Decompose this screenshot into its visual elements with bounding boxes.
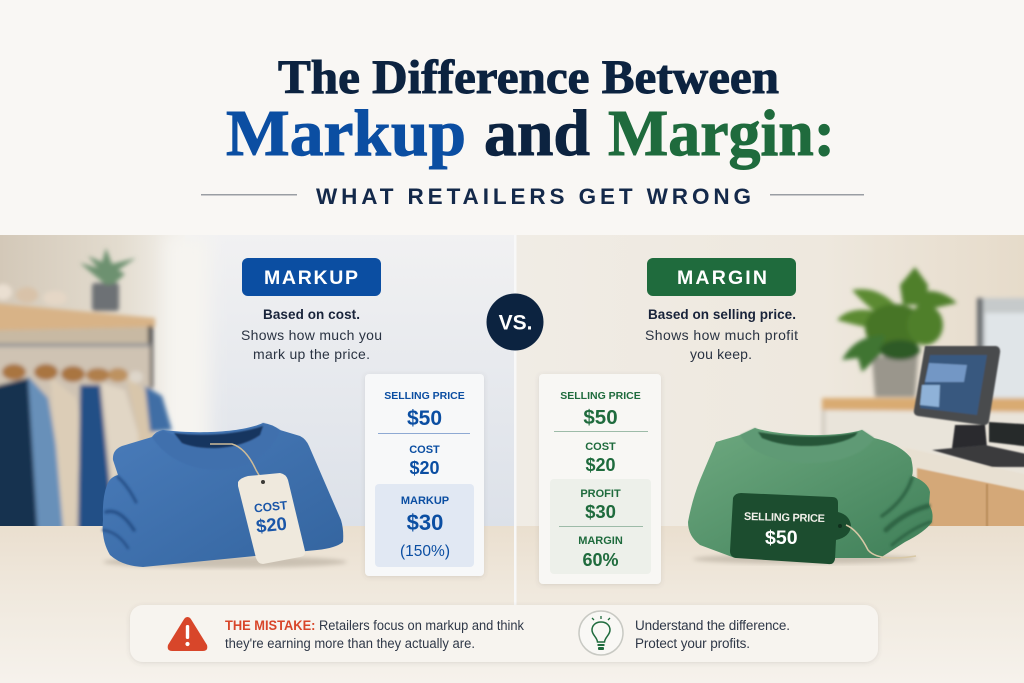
badge: margin bbox=[647, 258, 796, 296]
vs badge: VS. bbox=[499, 312, 532, 334]
text: margin description bbox=[645, 307, 798, 362]
profit and margin box: $30 bbox=[585, 501, 616, 522]
panel: margin background scene bbox=[515, 235, 1024, 540]
cost tag: $20 bbox=[255, 513, 288, 537]
panel: margin numbers card: SELLING PRICE bbox=[560, 390, 641, 402]
panel: margin numbers card bbox=[539, 374, 661, 584]
text: the mistake: they're earning more than they actually are. bbox=[225, 636, 475, 651]
markup highlight box bbox=[375, 484, 474, 567]
panel: markup numbers card: $50 bbox=[407, 407, 442, 430]
text: margin description: you keep. bbox=[690, 346, 752, 362]
panel divider bbox=[514, 235, 516, 605]
vs badge bbox=[486, 294, 544, 350]
desk surface and lower background bbox=[0, 526, 1024, 683]
icon: light bulb bbox=[579, 611, 623, 655]
panel: markup numbers card: SELLING PRICE bbox=[384, 390, 465, 402]
text: the mistake: THE MISTAKE: Retailers focus on markup and think bbox=[225, 618, 524, 633]
markup highlight box: MARKUP bbox=[401, 495, 449, 507]
panel: markup numbers card: $20 bbox=[409, 458, 440, 478]
text: the mistake bbox=[225, 618, 524, 651]
text: takeaway: Protect your profits. bbox=[635, 636, 750, 651]
panel: markup background scene bbox=[0, 235, 515, 540]
markup highlight box: (150%) bbox=[400, 543, 450, 560]
badge: markup bbox=[242, 258, 381, 296]
profit and margin box: MARGIN bbox=[578, 535, 623, 547]
cost tag bbox=[210, 444, 305, 564]
text: markup description: Shows how much you bbox=[241, 327, 382, 343]
icon: warning triangle bbox=[168, 617, 207, 651]
profit and margin box: 60% bbox=[582, 550, 619, 570]
panel: margin numbers card: $50 bbox=[583, 406, 618, 429]
profit and margin box bbox=[550, 479, 651, 574]
text: margin description: Based on selling price. bbox=[648, 307, 796, 322]
badge: margin: MARGIN bbox=[677, 267, 767, 289]
title: and bbox=[484, 97, 590, 170]
subtitle: WHAT RETAILERS GET WRONG bbox=[316, 184, 751, 209]
text: markup description: Based on cost. bbox=[263, 307, 360, 322]
sweater: green with selling price tag bbox=[688, 428, 933, 564]
title bbox=[226, 51, 835, 170]
title: Markup bbox=[226, 97, 466, 170]
text: takeaway: Understand the difference. bbox=[635, 618, 790, 633]
text: markup description bbox=[241, 307, 382, 362]
badge: markup: MARKUP bbox=[264, 267, 358, 289]
icon: plant leaves bbox=[837, 267, 957, 372]
panel: margin numbers card: COST bbox=[585, 441, 616, 453]
panel: markup numbers card: COST bbox=[409, 444, 440, 456]
text: markup description: mark up the price. bbox=[253, 346, 370, 362]
selling price tag: SELLING PRICE bbox=[744, 511, 825, 525]
panel: margin numbers card: $20 bbox=[585, 455, 616, 475]
sweater: blue with cost tag bbox=[103, 423, 347, 568]
panel: bottom callout bar bbox=[130, 605, 878, 662]
profit and margin box: PROFIT bbox=[580, 488, 621, 500]
markup highlight box: $30 bbox=[407, 510, 443, 535]
selling price tag: $50 bbox=[765, 527, 798, 549]
text: margin description: Shows how much profit bbox=[645, 327, 798, 343]
text: takeaway bbox=[635, 618, 790, 651]
selling price tag bbox=[730, 493, 916, 564]
panel: markup numbers card bbox=[365, 374, 484, 576]
cost tag: COST bbox=[253, 498, 289, 516]
title: The Difference Between bbox=[278, 51, 779, 104]
title: Margin: bbox=[608, 97, 835, 170]
